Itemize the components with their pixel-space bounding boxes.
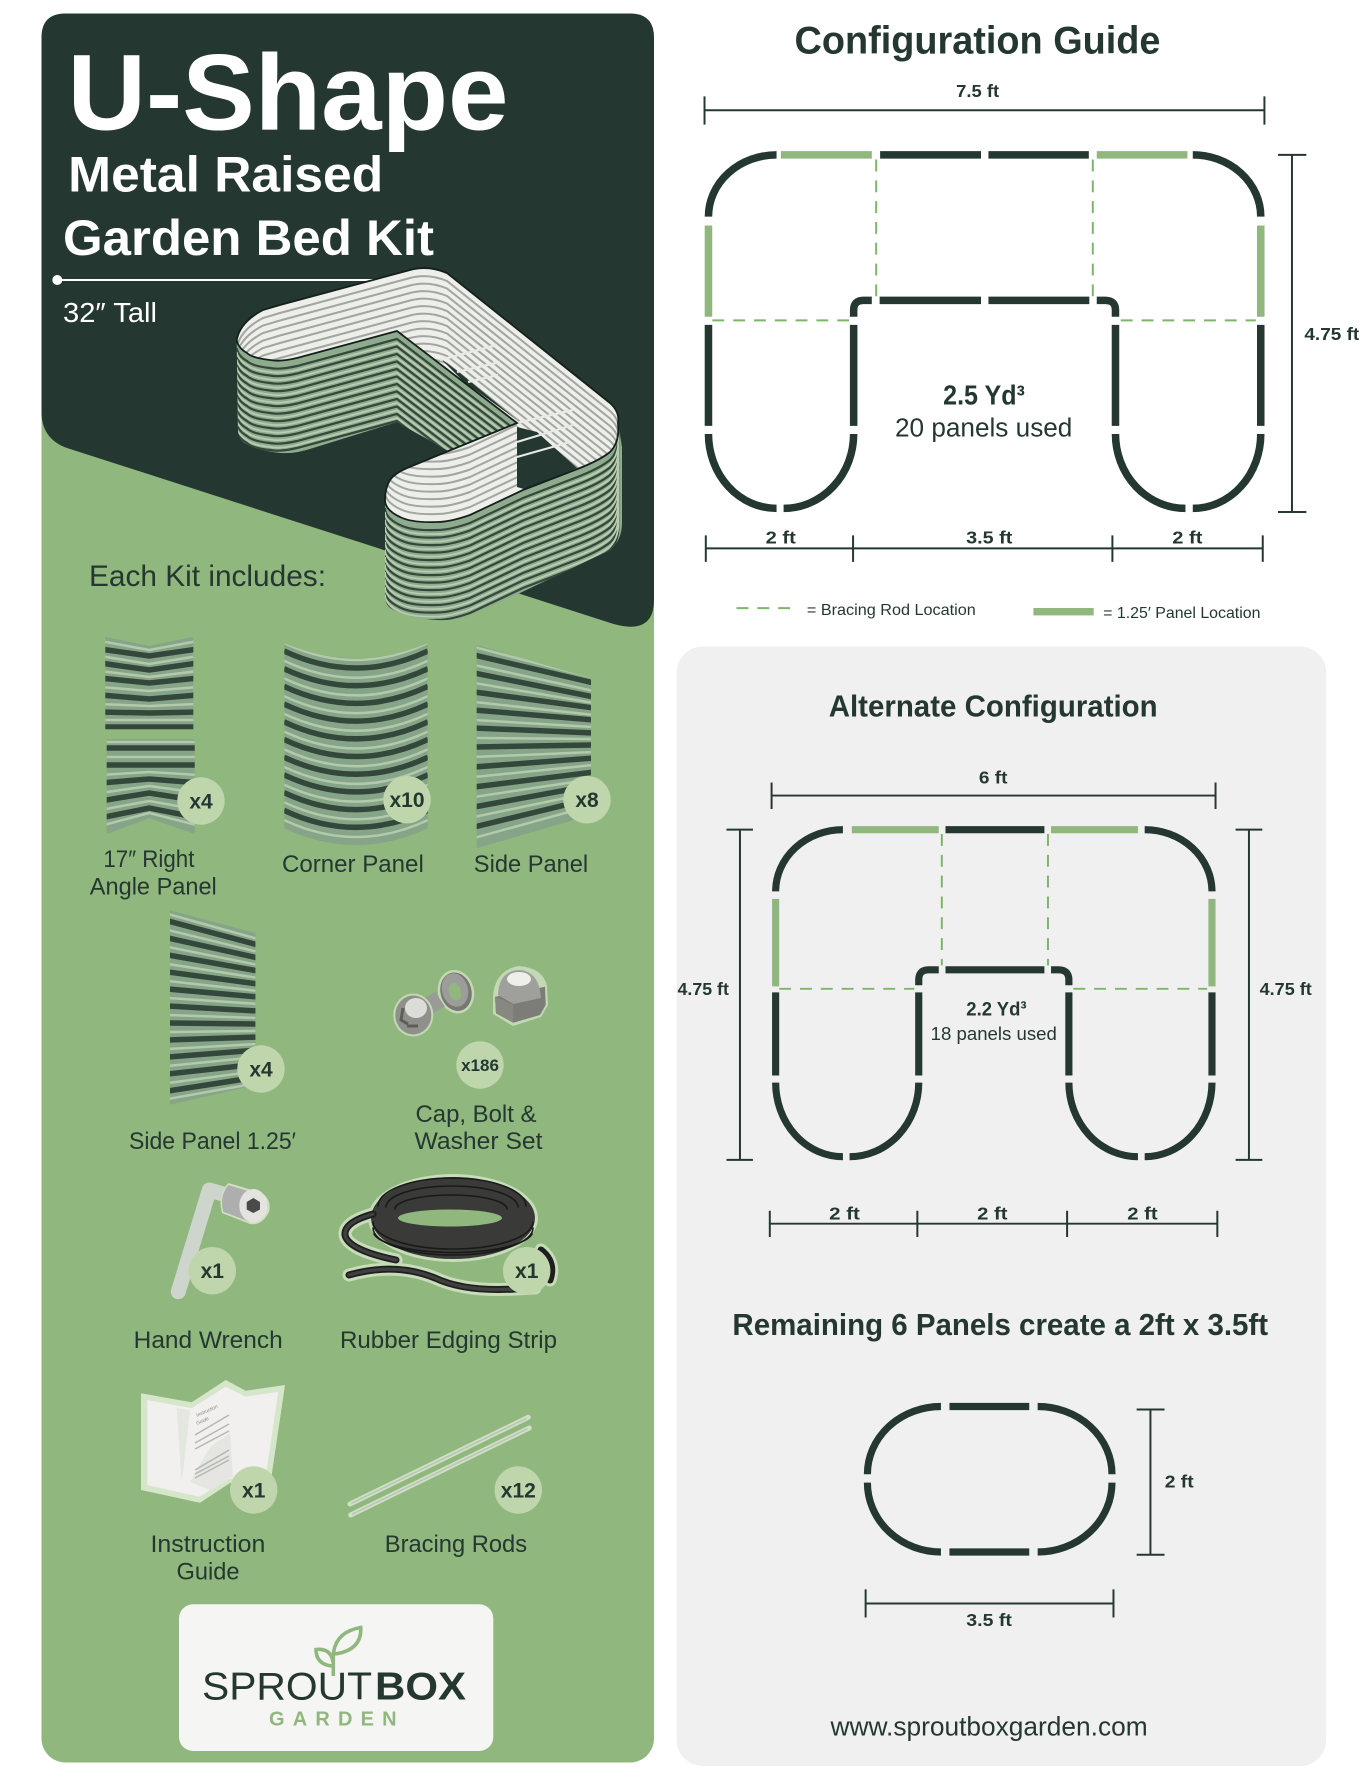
wordmark: GARDEN — [269, 1708, 397, 1730]
legend: = 1.25′ Panel Location — [1103, 605, 1260, 622]
dimension: 2 ft: 2 ft — [1165, 1471, 1194, 1491]
badge x1: x1 — [242, 1480, 266, 1502]
dimension: bottom widths: 2 ft — [1127, 1204, 1158, 1224]
dimension: 7.5 ft: 7.5 ft — [956, 81, 999, 101]
outline: 1.25 ft green panels — [776, 830, 1212, 986]
capacity text: 20 panels used — [895, 414, 1072, 442]
outline: dark panels — [776, 830, 1212, 1157]
item: cap, bolt and washer set — [393, 966, 548, 1155]
icon: folded guide: Instruction — [195, 1404, 219, 1419]
subtitle: Garden Bed Kit: Garden Bed Kit — [63, 210, 434, 266]
dimension: bottom widths: 2 ft — [1172, 528, 1202, 548]
outline: dark panels — [708, 155, 1261, 508]
item: bracing rods — [350, 1417, 542, 1558]
item: side panel 1.25 — [129, 905, 296, 1155]
dimension: bottom widths: 2 ft — [829, 1204, 860, 1224]
label — [90, 846, 217, 900]
icon: bolt and washer — [393, 966, 479, 1036]
dimension: right 4.75 ft — [1236, 830, 1312, 1160]
badge x8 — [563, 776, 611, 823]
item: rubber edging strip — [340, 1174, 557, 1354]
capacity text: 18 panels used — [931, 1023, 1057, 1044]
label: Bracing Rods — [385, 1531, 527, 1558]
wordmark — [202, 1665, 466, 1730]
legend: = Bracing Rod Location — [807, 602, 976, 619]
icon: rods — [350, 1417, 529, 1515]
dimension: left 4.75 ft: 4.75 ft — [678, 979, 729, 999]
dimension: 6 ft — [772, 767, 1216, 809]
wordmark: BOX — [375, 1665, 466, 1708]
label: Angle Panel — [90, 873, 217, 900]
icon: rubber coil — [345, 1174, 552, 1290]
dark header background — [42, 14, 654, 627]
label: Washer Set — [414, 1128, 543, 1155]
dimension: bottom widths — [770, 1204, 1217, 1237]
badge x4: x4 — [249, 1058, 273, 1082]
item: hand wrench — [134, 1183, 283, 1354]
label — [414, 1101, 543, 1155]
item: 17 inch right angle panel — [90, 630, 225, 900]
badge x1: x1 — [515, 1260, 539, 1283]
dimension: bottom widths: 2 ft — [977, 1204, 1007, 1224]
label: Side Panel 1.25′ — [129, 1128, 296, 1155]
capacity text: 2.2 Yd³ — [966, 998, 1027, 1020]
dimension: bottom widths — [706, 528, 1263, 562]
icon: wrench — [178, 1183, 270, 1292]
diagram: alternate layout — [678, 767, 1312, 1237]
label: Guide — [176, 1558, 240, 1586]
dimension: bottom widths: 2 ft — [766, 528, 796, 548]
badge x186 — [456, 1041, 504, 1089]
title: U-Shape: U-Shape — [68, 32, 508, 152]
icon: cap nut — [493, 966, 548, 1026]
dimension: 3.5 ft — [866, 1589, 1113, 1630]
label: Side Panel — [474, 851, 588, 878]
label: Rubber Edging Strip — [340, 1327, 557, 1354]
label: Cap, Bolt & — [416, 1101, 536, 1128]
dimension: 4.75 ft — [1278, 155, 1359, 512]
diagram: main configuration — [705, 81, 1359, 622]
dimension: 4.75 ft: 4.75 ft — [1304, 324, 1359, 344]
outline: 1.25 ft green panels — [708, 155, 1261, 317]
dimension: 6 ft: 6 ft — [979, 767, 1007, 787]
badge x1 — [230, 1466, 277, 1514]
logo card — [179, 1604, 493, 1751]
badge x10: x10 — [389, 789, 425, 812]
illustration: U-shape raised bed — [230, 260, 630, 630]
badge x1 — [189, 1247, 236, 1294]
heading: each kit includes: Each Kit includes: — [89, 560, 326, 593]
item: side panel — [474, 640, 611, 878]
divider line with dot — [52, 275, 375, 285]
heading: alternate configuration: Alternate Configuration — [829, 688, 1158, 724]
subtitle: Metal Raised: Metal Raised — [68, 147, 383, 203]
diagram: remaining oval — [867, 1406, 1112, 1552]
badge x1 — [503, 1247, 550, 1294]
dimension: bottom widths: 3.5 ft — [966, 528, 1012, 548]
badge x4 — [177, 777, 225, 825]
badge x12 — [495, 1466, 542, 1514]
dimension: 7.5 ft — [705, 81, 1264, 125]
capacity text — [895, 380, 1072, 442]
wordmark: SPROUT — [202, 1665, 372, 1708]
dimension: 2 ft — [1137, 1410, 1194, 1555]
heading: configuration guide: Configuration Guide — [794, 20, 1160, 63]
icon: folded guide — [141, 1380, 285, 1503]
bracing rods — [779, 834, 1207, 989]
capacity text: 2.5 Yd³ — [943, 380, 1025, 411]
height label: 32″ Tall — [63, 297, 157, 328]
label: 17″ Right — [103, 846, 195, 873]
label — [150, 1531, 265, 1586]
website: www.sproutboxgarden.com — [830, 1711, 1148, 1742]
section: remaining panels — [732, 1307, 1268, 1742]
badge x4: x4 — [189, 790, 213, 814]
label: Instruction — [150, 1531, 265, 1558]
panel: alternate configuration — [677, 646, 1326, 1766]
icon: sprout — [316, 1628, 361, 1676]
icon: folded guide: Guide — [195, 1416, 210, 1427]
badge x10 — [383, 776, 431, 823]
badge x1: x1 — [201, 1260, 224, 1283]
label: Corner Panel — [282, 851, 424, 878]
item: instruction guide — [141, 1380, 285, 1586]
bracing rods — [712, 160, 1256, 320]
dimension: right 4.75 ft: 4.75 ft — [1260, 979, 1312, 999]
label: Hand Wrench — [134, 1327, 283, 1354]
badge x186: x186 — [461, 1056, 499, 1075]
heading: remaining panels: Remaining 6 Panels create a 2ft x 3.5ft — [732, 1307, 1268, 1342]
badge x8: x8 — [575, 789, 599, 812]
capacity text — [931, 998, 1057, 1044]
badge x12: x12 — [501, 1480, 536, 1502]
legend — [737, 602, 1260, 622]
item: corner panel — [280, 640, 432, 878]
dimension: 3.5 ft: 3.5 ft — [966, 1610, 1012, 1630]
dimension: left 4.75 ft — [678, 830, 753, 1160]
badge x4 — [237, 1045, 285, 1093]
panel: left kit panel — [42, 14, 654, 1762]
